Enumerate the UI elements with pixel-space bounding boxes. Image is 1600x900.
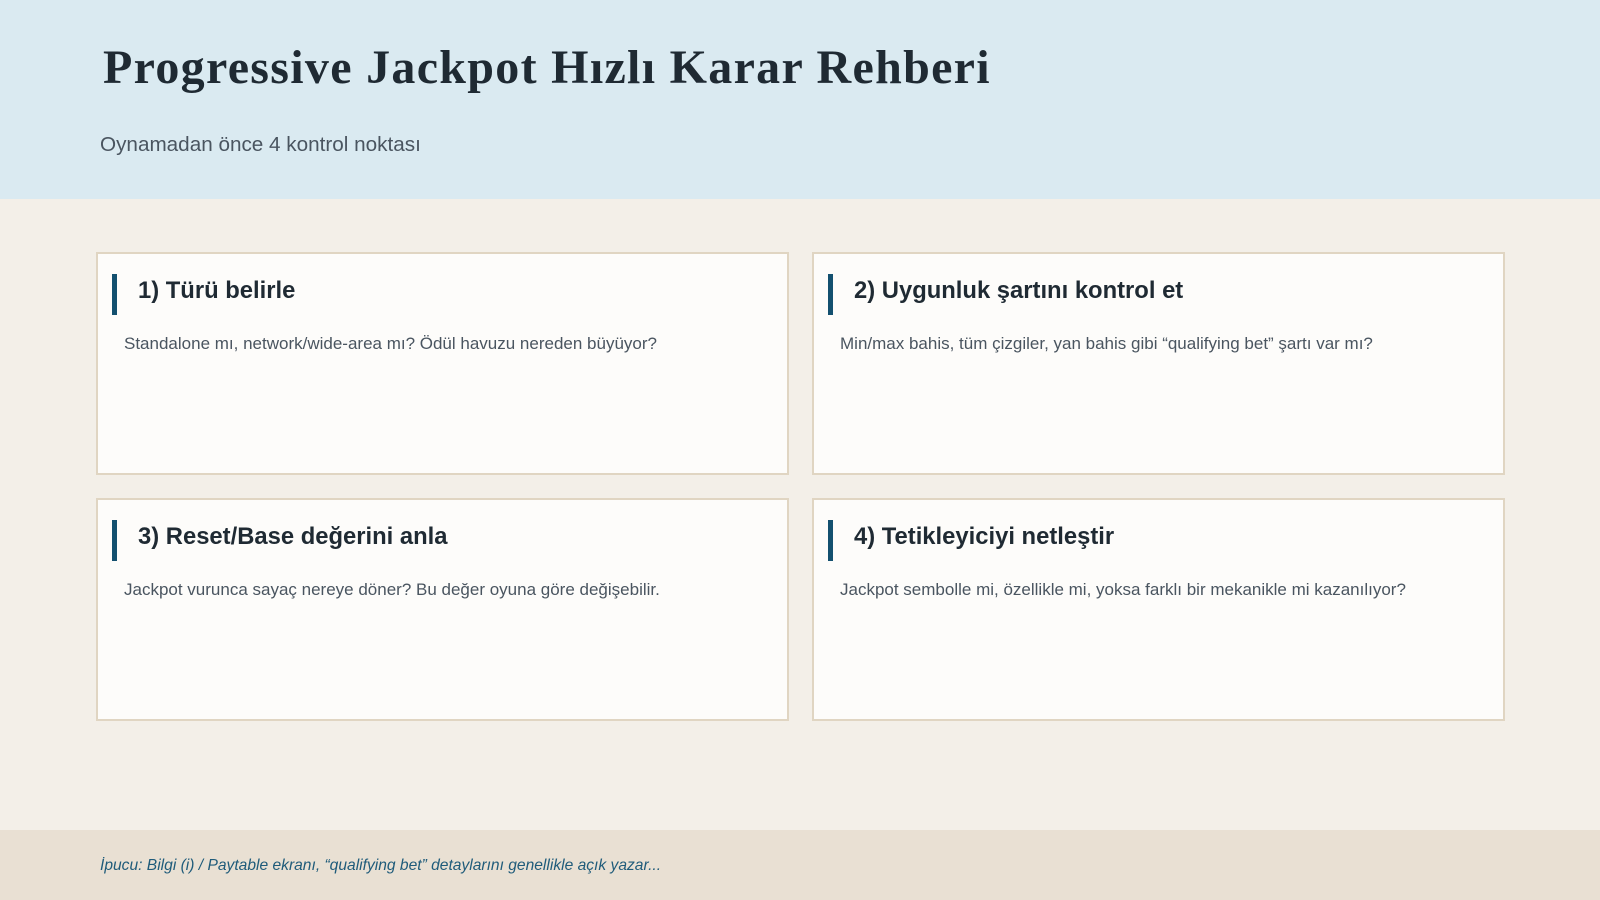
heading: 2) Uygunluk şartını kontrol et — [854, 277, 1183, 304]
subtitle: Oynamadan önce 4 kontrol noktası — [100, 133, 421, 156]
text: Min/max bahis, tüm çizgiler, yan bahis gibi “qualifying bet” şartı var mı? — [840, 334, 1373, 353]
heading: 4) Tetikleyiciyi netleştir — [854, 523, 1114, 550]
tip text: İpucu: Bilgi (i) / Paytable ekranı, “qualifying bet” detaylarını genellikle açık yazar... — [100, 857, 661, 874]
accent bar — [828, 274, 833, 315]
accent bar — [112, 274, 117, 315]
text: Jackpot vurunca sayaç nereye döner? Bu değer oyuna göre değişebilir. — [124, 580, 660, 599]
text: Standalone mı, network/wide-area mı? Ödül havuzu nereden büyüyor? — [124, 334, 657, 353]
panel: 3 — [96, 498, 789, 721]
title: Progressive Jackpot Hızlı Karar Rehberi — [103, 41, 991, 94]
panel: 1 — [96, 252, 789, 475]
accent bar — [828, 520, 833, 561]
heading: 1) Türü belirle — [138, 277, 295, 304]
heading: 3) Reset/Base değerini anla — [138, 523, 448, 550]
panel: 4 — [812, 498, 1505, 721]
accent bar — [112, 520, 117, 561]
panel: 2 — [812, 252, 1505, 475]
text: Jackpot sembolle mi, özellikle mi, yoksa farklı bir mekanikle mi kazanılıyor? — [840, 580, 1406, 599]
footer — [0, 830, 1600, 900]
header — [0, 0, 1600, 199]
